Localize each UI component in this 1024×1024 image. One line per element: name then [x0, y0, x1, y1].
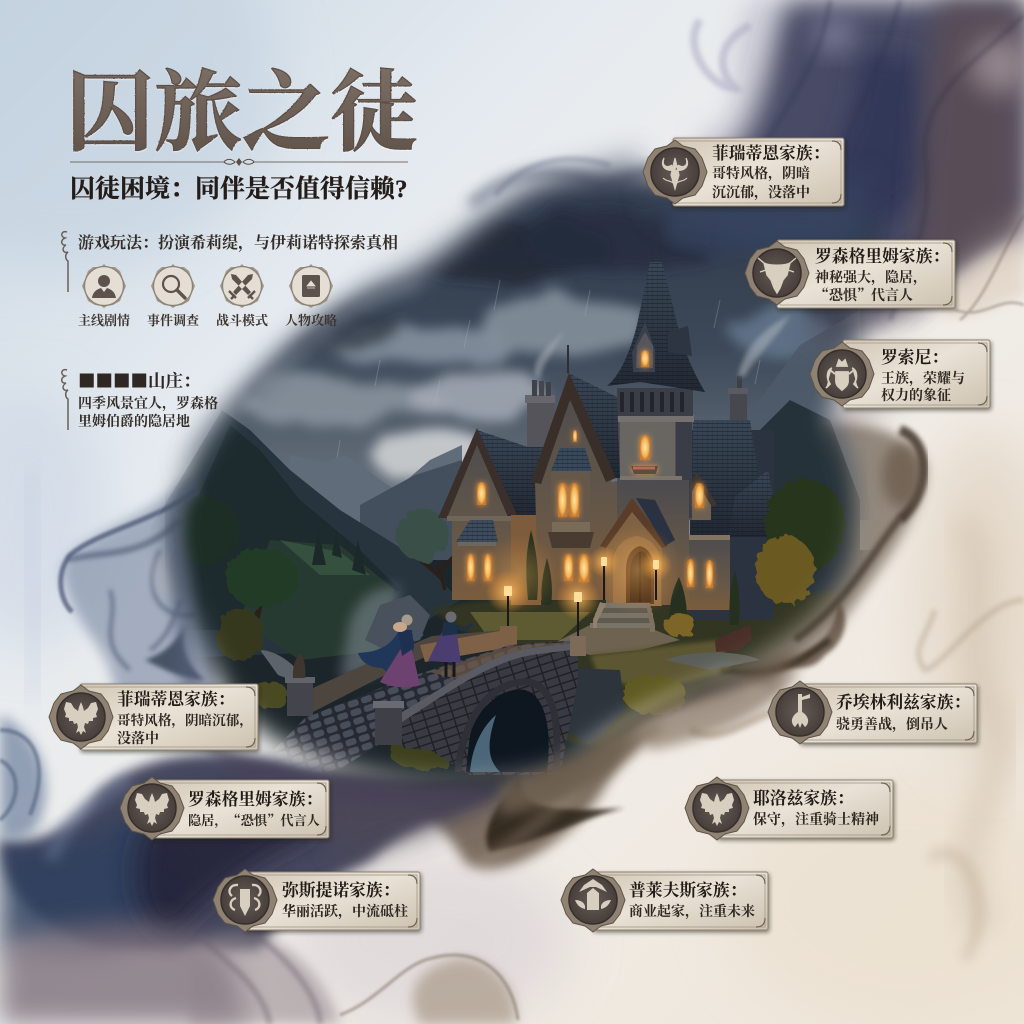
card: Rosengrim family left: 罗森格里姆家族： [188, 789, 322, 809]
left chimney [525, 336, 560, 447]
card: Rosengrim family top: 罗森格里姆家族： [815, 246, 949, 266]
subtitle: 囚徒困境：同伴是否值得信赖? [70, 174, 408, 203]
dark base of the scene [192, 550, 868, 794]
card: Ferridien family top: 沉沉郁，没落中 [712, 184, 810, 201]
smoke: lower left navy and purple mass [0, 715, 520, 1024]
illustration: manor in a storm [154, 160, 880, 794]
card: Mistino family: 弥斯提诺家族： [282, 880, 399, 900]
lamps [486, 546, 672, 636]
label: combat: 战斗模式 [216, 313, 268, 328]
card: Ferridien family top: 哥特风格，阴暗 [712, 165, 810, 182]
icon: investigation magnifier [151, 264, 195, 308]
card: Yeluoci family: 保守，注重骑士精神 [753, 811, 879, 828]
smoke: edges over the scene [174, 170, 905, 815]
manor note: ■■■■山庄： [78, 368, 200, 393]
title divider ornament [70, 158, 408, 166]
card: Joelinliz family: 骁勇善战，倒吊人 [836, 716, 948, 733]
card: Rosengrim family left: 隐居，“恐惧”代言人 [188, 810, 320, 829]
card: Ferridien family top [643, 138, 844, 206]
flourish: gameplay [62, 232, 68, 292]
left wing [438, 428, 546, 605]
icon: character guide book [289, 264, 333, 308]
card: Rosoni [810, 340, 990, 408]
near wall with arch [402, 642, 578, 775]
manor note: 里姆伯爵的隐居地 [78, 413, 190, 430]
windows [467, 350, 713, 588]
card: Joelinliz family: 乔埃林利兹家族： [836, 692, 970, 712]
card: Yeluoci family: 耶洛兹家族： [753, 788, 854, 808]
card: Joelinliz family [768, 681, 977, 744]
figure: woman in navy cloak [358, 614, 423, 687]
central wing [531, 345, 625, 600]
card: Rosoni: 罗索尼： [881, 347, 948, 367]
card: Yeluoci family [685, 777, 893, 840]
card: Rosengrim family top: 神秘强大，隐居， [815, 269, 927, 286]
card: Pleves family: 商业起家，注重未来 [629, 903, 755, 920]
trees [171, 496, 455, 709]
card: Ferridien family left [49, 684, 258, 750]
right chimney [728, 316, 790, 420]
right wing [678, 420, 774, 620]
card: Ferridien family top: 菲瑞蒂恩家族： [712, 143, 829, 163]
smoke: wash and dark stroke right of the scene [720, 424, 925, 690]
smoke: upper right dark mass [690, 0, 1024, 325]
icon row with labels [78, 264, 337, 328]
card: Mistino family: 华丽活跃，中流砥柱 [282, 903, 408, 920]
ground behind the manor [432, 592, 835, 744]
smoke: left blue swirl [61, 480, 220, 718]
manor note [78, 368, 218, 430]
figure: companion in purple coat [428, 612, 472, 677]
mountains and valley [130, 310, 870, 685]
rain streaks [336, 280, 760, 458]
smoke: bottom wisps [190, 925, 518, 1024]
card: Ferridien family left: 没落中 [117, 730, 159, 747]
card: Mistino family [213, 869, 420, 932]
label: investigation: 事件调查 [147, 313, 199, 328]
label: main story: 主线剧情 [78, 313, 130, 328]
smoke: brown band below the scene [400, 650, 800, 869]
icon: combat crossed swords [220, 264, 264, 308]
manor note: 四季风景宜人，罗森格 [78, 395, 218, 412]
manor [438, 243, 790, 632]
card: Rosengrim family left [120, 777, 329, 840]
smoke: dark band wrapping the scene [180, 150, 690, 470]
card: Ferridien family left: 菲瑞蒂恩家族： [117, 689, 234, 709]
bushes and right tree [389, 479, 845, 770]
stone bridge [262, 626, 586, 775]
entrance steps [590, 602, 655, 632]
card: Pleves family [561, 869, 768, 932]
card: Rosoni: 王族，荣耀与 [881, 370, 965, 387]
far parapet [313, 630, 505, 712]
card: Ferridien family left: 哥特风格，阴暗沉郁， [117, 712, 253, 729]
card: Rosoni: 权力的象征 [881, 387, 951, 404]
lower tower and porch [600, 480, 689, 606]
warm glow and cypresses [480, 524, 740, 625]
card: Pleves family: 普莱夫斯家族： [629, 880, 746, 900]
deck [262, 640, 580, 775]
title: 囚旅之徒 [66, 66, 418, 163]
gameplay description: 游戏玩法：扮演希莉缇，与伊莉诺特探索真相 [78, 233, 398, 253]
card: Rosengrim family top [745, 240, 955, 308]
label: character guide: 人物攻略 [285, 313, 337, 328]
card: Rosengrim family top: “恐惧”代言人 [815, 285, 913, 305]
tower [607, 243, 705, 523]
icon: main story person [82, 264, 126, 308]
flourish: manor [62, 370, 68, 430]
sky and clouds [158, 171, 886, 550]
